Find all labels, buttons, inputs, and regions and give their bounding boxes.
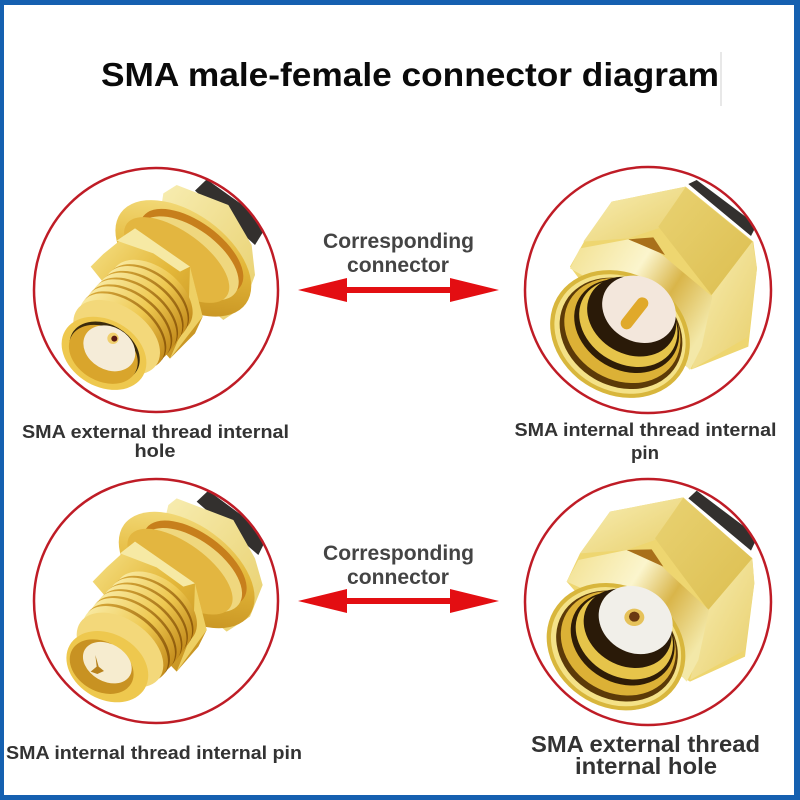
arrow: double red, top <box>298 278 499 302</box>
rear hex nut <box>153 498 263 632</box>
washer cavity <box>125 192 258 311</box>
label: corresponding connector, bottom: Corresponding <box>323 542 474 565</box>
threaded barrel <box>63 556 211 703</box>
label: SMA external thread internal hole, left: SMA external thread internal <box>22 422 289 442</box>
label: corresponding connector, bottom <box>323 542 474 589</box>
label: corresponding connector, top: connector <box>347 254 449 277</box>
label: SMA external thread internal hole, left: hole <box>134 441 176 461</box>
centre hole <box>624 609 644 626</box>
threaded opening <box>523 558 709 735</box>
label: SMA external thread internal hole, bottom right: internal hole <box>575 753 717 779</box>
circle outline: bottom right <box>525 479 771 725</box>
label: SMA internal thread internal pin, right: pin <box>631 443 659 463</box>
washer ring <box>98 488 276 652</box>
front hex nut <box>93 542 207 672</box>
collar <box>567 550 709 682</box>
front hex nut <box>91 228 203 359</box>
washer ring <box>94 176 272 340</box>
cable <box>688 491 758 551</box>
panel: SMA internal thread internal pin connector <box>550 180 757 398</box>
label: SMA external thread internal hole, bottom right: SMA external thread <box>531 731 760 757</box>
title: SMA male-female connector diagram <box>101 56 719 93</box>
centre pin <box>627 303 642 323</box>
washer cavity <box>129 504 261 623</box>
cable <box>195 179 268 245</box>
circle outline: top right <box>525 167 771 413</box>
collar <box>570 239 712 370</box>
label: SMA external thread internal hole, left <box>22 422 289 461</box>
cable <box>197 491 268 555</box>
arrow: double red, bottom <box>298 589 499 613</box>
label: SMA internal thread internal pin, right: SMA internal thread internal <box>514 420 776 440</box>
centre hole <box>107 333 119 344</box>
label: SMA internal thread internal pin, bottom left: SMA internal thread internal pin <box>6 743 302 763</box>
circle outline: bottom left <box>34 479 278 723</box>
centre pin <box>91 655 104 674</box>
panel: SMA external thread internal hole connector <box>62 180 262 390</box>
hex body <box>570 187 757 369</box>
label: SMA internal thread internal pin, right <box>514 420 776 463</box>
label: corresponding connector, top: Corresponding <box>323 230 474 253</box>
label: corresponding connector, bottom: connector <box>347 566 449 589</box>
connector face <box>53 617 161 717</box>
hex body <box>567 497 754 682</box>
label: SMA external thread internal hole, bottom right <box>531 731 760 779</box>
connector face <box>48 302 160 405</box>
panel: SMA external thread internal hole (reverse) connector <box>546 490 754 710</box>
rear hex nut <box>153 185 255 320</box>
cable <box>688 180 757 236</box>
panel: SMA internal thread internal pin (reverse) connector <box>66 492 264 702</box>
threaded opening <box>527 245 713 423</box>
circle outline: top left <box>34 168 278 412</box>
threaded barrel <box>59 245 206 390</box>
label: corresponding connector, top <box>323 230 474 277</box>
